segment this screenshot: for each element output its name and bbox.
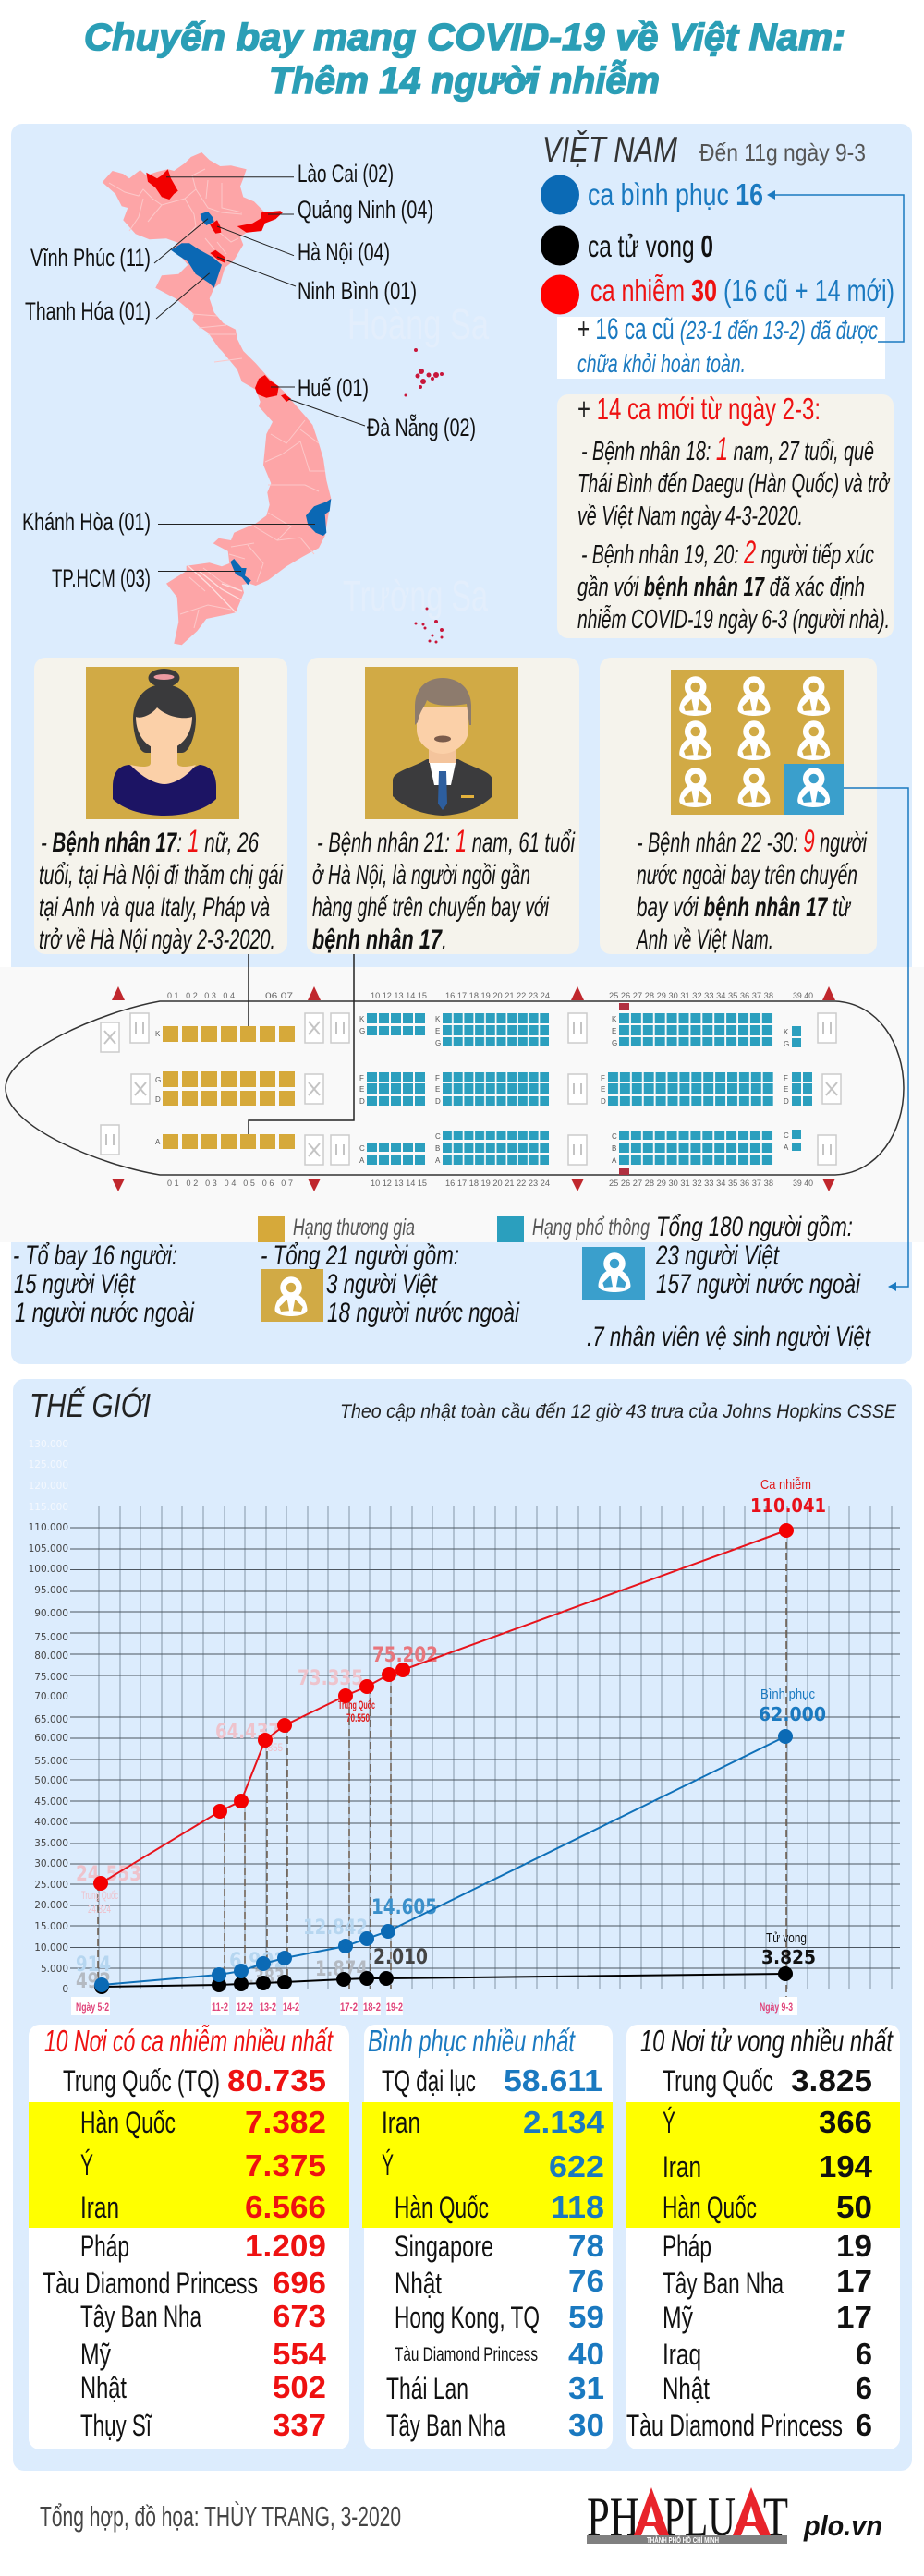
text: business class passengers: 18 người nước ngoài bbox=[327, 1298, 520, 1328]
rows: most infected: Nhật bbox=[80, 2371, 127, 2404]
arrow: old cases to recovered bbox=[767, 190, 904, 342]
seat letters: E bbox=[784, 1085, 788, 1094]
rows: most infected: 1.209 bbox=[245, 2229, 326, 2263]
rows: most deaths: 366 bbox=[819, 2105, 872, 2139]
rows: most infected: Iran bbox=[80, 2191, 119, 2224]
highlight: top deaths bbox=[626, 2102, 900, 2228]
seat letters: B bbox=[612, 1144, 616, 1153]
faded and highlighted value labels: 492 bbox=[76, 1970, 111, 1993]
end label: recovered: 62.000 bbox=[759, 1703, 826, 1725]
province labels: Huế (01) bbox=[298, 374, 369, 402]
business class seats bbox=[163, 1026, 295, 1149]
text: crew bbox=[13, 1240, 195, 1328]
rows: most deaths: Iran bbox=[663, 2150, 701, 2183]
y axis labels: 45.000 bbox=[34, 1796, 68, 1808]
seat letters: G bbox=[155, 1076, 161, 1084]
seat legend: Hạng thương gia bbox=[293, 1215, 415, 1240]
rows: most infected: Thụy Sĩ bbox=[80, 2409, 152, 2442]
rows: most deaths: Iraq bbox=[663, 2338, 701, 2371]
text: patients 22-30: - Bệnh nhân 22 -30: 9 người bbox=[637, 824, 868, 859]
seat letters: A bbox=[435, 1156, 441, 1165]
seat letters: F bbox=[784, 1074, 788, 1082]
rows: most recovered: 30 bbox=[568, 2408, 604, 2442]
rows: most infected: 80.735 bbox=[227, 2063, 326, 2098]
text: economy class passengers: 157 người nước ngoài bbox=[656, 1269, 861, 1300]
province labels: Khánh Hòa (01) bbox=[22, 508, 151, 536]
rows: most recovered: 118 bbox=[551, 2190, 604, 2224]
y axis labels: 75.000 bbox=[34, 1632, 68, 1643]
icon grid: nine passengers bbox=[671, 670, 844, 815]
province labels: Quảng Ninh (04) bbox=[298, 196, 433, 224]
date axis labels: 11-2 bbox=[212, 2002, 228, 2014]
y axis labels: 65.000 bbox=[34, 1714, 68, 1725]
logo: Pháp Luật: THÀNH PHỐ HỒ CHÍ MINH bbox=[647, 2534, 719, 2545]
heading: most recovered: Bình phục nhiều nhất bbox=[368, 2024, 576, 2058]
galleys and toilets bbox=[101, 1013, 841, 1165]
seat letters: E bbox=[435, 1027, 440, 1035]
rows: most recovered: 40 bbox=[568, 2337, 604, 2371]
text: business class passengers bbox=[261, 1240, 520, 1328]
rows: most deaths: Tàu Diamond Princess bbox=[626, 2409, 843, 2442]
rows: most deaths: Hàn Quốc bbox=[663, 2191, 757, 2224]
y axis labels: 110.000 bbox=[29, 1522, 68, 1533]
rows: most recovered: 59 bbox=[568, 2300, 604, 2334]
text: patients 22-30: Anh về Việt Nam. bbox=[636, 925, 773, 955]
watermark: Trường Sa islands bbox=[343, 572, 488, 643]
text: patient 17 bbox=[39, 824, 284, 955]
faded and highlighted value labels: 2.010 bbox=[373, 1946, 428, 1969]
rows: most recovered: Hong Kong, TQ bbox=[395, 2301, 540, 2334]
seat letters: A bbox=[155, 1138, 161, 1146]
y axis labels: 120.000 bbox=[29, 1481, 68, 1492]
credit: Tổng hợp, đồ họa: THÙY TRANG, 3-2020 bbox=[40, 2500, 401, 2533]
highlight: top recovered bbox=[362, 2102, 613, 2228]
province labels: TP.HCM (03) bbox=[52, 564, 151, 592]
rows: most deaths: 6 bbox=[856, 2337, 872, 2371]
row numbers: 10 12 13 14 15 bbox=[371, 991, 427, 1000]
province labels: Lào Cai (02) bbox=[298, 160, 394, 187]
text: economy class passengers bbox=[582, 1212, 871, 1352]
y axis labels: 55.000 bbox=[34, 1756, 68, 1767]
text: patient 21: bệnh nhân 17. bbox=[312, 925, 447, 955]
y axis labels: 60.000 bbox=[34, 1733, 68, 1744]
table: most infected bbox=[29, 2024, 349, 2449]
seat letters: F bbox=[435, 1074, 440, 1082]
rows: most infected: 6.566 bbox=[245, 2190, 326, 2224]
y axis labels: 105.000 bbox=[29, 1543, 68, 1554]
economy class seats bbox=[367, 1013, 812, 1165]
y axis labels: 5.000 bbox=[41, 1964, 68, 1975]
seat letters: A bbox=[359, 1156, 365, 1165]
seat letters: F bbox=[601, 1074, 605, 1082]
rows: most infected: 696 bbox=[273, 2266, 326, 2300]
card: patient 17 bbox=[34, 658, 287, 955]
panel: Thế giới bbox=[13, 1379, 912, 2471]
small China annotations: 70.550 bbox=[346, 1711, 370, 1724]
portrait: woman bbox=[86, 667, 239, 819]
rows: most recovered: 2.134 bbox=[523, 2105, 605, 2139]
y axis labels: 10.000 bbox=[34, 1942, 68, 1953]
logo: Pháp Luật bbox=[587, 2486, 882, 2547]
exit markers bbox=[112, 986, 835, 1191]
text: patient 17: tuổi, tại Hà Nội đi thăm chị gái bbox=[39, 860, 284, 890]
date axis labels: 18-2 bbox=[363, 2002, 381, 2014]
date axis labels: Ngày 9-3 bbox=[760, 2002, 793, 2014]
line chart bbox=[29, 1439, 900, 2015]
aircraft outline bbox=[6, 1001, 904, 1175]
y axis labels: 95.000 bbox=[34, 1585, 68, 1596]
end label: infected: Ca nhiễm bbox=[760, 1477, 811, 1493]
logo: Pháp Luật: PLU bbox=[663, 2486, 736, 2547]
text: patient 21 bbox=[312, 824, 576, 955]
dashed date guides bbox=[98, 1530, 786, 2004]
leader lines bbox=[154, 177, 365, 571]
map of Vietnam bbox=[22, 152, 489, 645]
text: patients 22-30: bay với bệnh nhân 17 từ bbox=[637, 892, 851, 923]
y axis labels: 115.000 bbox=[29, 1502, 68, 1513]
portrait: man bbox=[365, 667, 518, 819]
row numbers: 25 26 27 28 29 30 31 32 33 34 35 36 37 38 bbox=[609, 1179, 773, 1188]
legend: infected bbox=[541, 273, 894, 314]
heading: Thế giới: THẾ GIỚI bbox=[30, 1385, 151, 1424]
rows: most recovered: 78 bbox=[568, 2229, 604, 2263]
date axis labels: 19-2 bbox=[386, 2002, 403, 2014]
rows: most deaths: 50 bbox=[836, 2190, 872, 2224]
end label: deaths bbox=[761, 1930, 816, 1968]
legend: recovered: ca bình phục 16 bbox=[588, 177, 763, 212]
rows: most infected: Pháp bbox=[80, 2230, 129, 2263]
y axis labels: 20.000 bbox=[34, 1900, 68, 1911]
faded and highlighted value labels: 914 bbox=[76, 1953, 111, 1977]
text: patient 21: - Bệnh nhân 21: 1 nam, 61 tuổi bbox=[317, 824, 576, 859]
row numbers: 16 17 18 19 20 21 22 23 24 bbox=[445, 1179, 550, 1188]
rows: most recovered: Tây Ban Nha bbox=[386, 2409, 505, 2442]
small China annotations bbox=[81, 1699, 375, 1916]
rows: most deaths: Pháp bbox=[663, 2230, 711, 2263]
faded and highlighted value labels: 64.437 bbox=[215, 1721, 280, 1744]
text: business class passengers: - Tổng 21 người gồm: bbox=[261, 1240, 459, 1271]
seat letters: G bbox=[612, 1039, 617, 1047]
date axis labels: Ngày 5-2 bbox=[76, 2002, 109, 2014]
seat letters: F bbox=[359, 1074, 364, 1082]
province labels: Thanh Hóa (01) bbox=[25, 297, 151, 325]
rows: most infected: 7.375 bbox=[245, 2148, 326, 2183]
logo: Pháp Luật: plo.vn bbox=[803, 2509, 882, 2542]
faded and highlighted value labels: 12.842 bbox=[303, 1917, 368, 1940]
faded and highlighted value labels bbox=[76, 1644, 438, 1993]
faded and highlighted value labels: 24.553 bbox=[76, 1863, 141, 1886]
callout: 16 old cases: chữa khỏi hoàn toàn. bbox=[578, 349, 746, 378]
rows: most infected: Trung Quốc (TQ) bbox=[63, 2064, 220, 2098]
row numbers: 39 40 bbox=[793, 991, 813, 1000]
rows: most deaths: Mỹ bbox=[663, 2301, 693, 2334]
logo: Pháp Luật: PH bbox=[587, 2486, 639, 2547]
watermark: Hoàng Sa islands: Hoàng Sa bbox=[347, 300, 489, 348]
callout: 16 old cases bbox=[557, 312, 885, 379]
row numbers: 16 17 18 19 20 21 22 23 24 bbox=[445, 991, 550, 1000]
seat letters: E bbox=[612, 1027, 616, 1035]
series: deaths bbox=[94, 1966, 793, 1994]
legend: recovered bbox=[541, 175, 763, 214]
y axis labels: 90.000 bbox=[34, 1608, 68, 1619]
y axis labels: 75.000 bbox=[34, 1672, 68, 1683]
rows: most deaths: Trung Quốc bbox=[663, 2064, 773, 2098]
seat letters: K bbox=[435, 1015, 441, 1023]
y axis labels: 25.000 bbox=[34, 1880, 68, 1891]
end label: infected: 110.041 bbox=[750, 1494, 826, 1517]
seat letters: C bbox=[612, 1132, 617, 1141]
rows: most deaths: Tây Ban Nha bbox=[663, 2267, 784, 2300]
y axis labels: 35.000 bbox=[34, 1838, 68, 1849]
y axis labels: 15.000 bbox=[34, 1921, 68, 1932]
legend: deaths bbox=[541, 225, 713, 266]
province labels: Đà Nẵng (02) bbox=[367, 413, 476, 441]
y axis labels bbox=[29, 1439, 68, 1995]
heading: Việt Nam bbox=[542, 130, 866, 170]
seat map band bbox=[0, 967, 924, 1242]
arrow: passengers to economy totals bbox=[844, 788, 908, 1291]
date axis labels: 14-2 bbox=[283, 2002, 299, 2014]
seat letters: A bbox=[784, 1143, 789, 1152]
faded and highlighted value labels: 73.335 bbox=[298, 1667, 363, 1690]
heading: Việt Nam: Đến 11g ngày 9-3 bbox=[699, 139, 866, 166]
rows: most recovered: 622 bbox=[549, 2149, 604, 2183]
panel: 14 new cases: + 14 ca mới từ ngày 2-3: bbox=[578, 392, 821, 426]
end label: deaths: 3.825 bbox=[761, 1946, 816, 1968]
province labels: Ninh Bình (01) bbox=[298, 277, 417, 305]
date axis labels: 12-2 bbox=[237, 2002, 253, 2014]
panel: 14 new cases: về Việt Nam ngày 4-3-2020. bbox=[578, 502, 803, 531]
rows: most deaths: 3.825 bbox=[791, 2063, 872, 2098]
seat legend: Hạng phổ thông bbox=[532, 1215, 650, 1240]
text: business class passengers: 3 người Việt bbox=[326, 1269, 438, 1300]
seat letters: G bbox=[784, 1040, 789, 1048]
icon: business passenger bbox=[261, 1269, 323, 1322]
series: infected bbox=[93, 1523, 794, 1891]
faded and highlighted value labels: 14.605 bbox=[371, 1896, 437, 1919]
rows: most recovered: Thái Lan bbox=[386, 2372, 468, 2405]
rows: most deaths: 194 bbox=[819, 2149, 873, 2183]
panel: 14 new cases: - Bệnh nhân 19, 20: 2 người tiếp xúc bbox=[581, 535, 874, 571]
series: recovered bbox=[94, 1729, 793, 1992]
rows: most recovered: Nhật bbox=[395, 2267, 442, 2300]
text: patient 21: hàng ghế trên chuyến bay với bbox=[312, 892, 550, 923]
watermark: Trường Sa islands: Trường Sa bbox=[343, 572, 488, 620]
text: economy class passengers: 23 người Việt bbox=[655, 1240, 780, 1271]
rows: most infected: 7.382 bbox=[245, 2105, 326, 2139]
end label: deaths: Tử vong bbox=[766, 1930, 807, 1946]
province labels bbox=[22, 160, 476, 592]
rows: most infected: Ý bbox=[80, 2148, 93, 2182]
seat legend bbox=[258, 1215, 650, 1242]
title: Thêm 14 người nhiễm bbox=[269, 59, 660, 102]
row numbers: 06 07 bbox=[265, 991, 293, 1000]
seat letters: A bbox=[612, 1156, 617, 1165]
seat letters: K bbox=[155, 1030, 161, 1038]
rows: most recovered: 31 bbox=[568, 2371, 604, 2405]
rows: most deaths: 17 bbox=[836, 2300, 872, 2334]
province labels: Hà Nội (04) bbox=[298, 238, 390, 266]
faded and highlighted value labels: 75.202 bbox=[372, 1644, 438, 1667]
rows: most deaths: 6 bbox=[856, 2408, 872, 2442]
rows: most recovered bbox=[382, 2063, 605, 2442]
rows: most deaths: 17 bbox=[836, 2264, 872, 2298]
rows: most recovered: Iran bbox=[382, 2106, 420, 2139]
heading: Việt Nam: VIỆT NAM bbox=[542, 130, 677, 170]
seat letters: D bbox=[601, 1097, 606, 1106]
faded and highlighted value labels: 6.902 bbox=[229, 1950, 286, 1973]
table: most deaths bbox=[626, 2024, 900, 2449]
small China annotations: 24.324 bbox=[88, 1903, 111, 1916]
end label: recovered: Bình phục bbox=[760, 1687, 815, 1702]
seat letters: K bbox=[784, 1028, 789, 1036]
rows: most infected: Tây Ban Nha bbox=[80, 2300, 201, 2333]
rows: most infected: 554 bbox=[273, 2337, 327, 2371]
seat letters: D bbox=[155, 1095, 161, 1104]
faded and highlighted value labels: 1.874 bbox=[315, 1958, 368, 1981]
row numbers bbox=[167, 991, 813, 1188]
y axis labels: 130.000 bbox=[29, 1439, 68, 1450]
seat letters: B bbox=[435, 1144, 440, 1153]
logo: Pháp Luật: T bbox=[763, 2486, 788, 2547]
date axis labels: 13-2 bbox=[260, 2002, 276, 2014]
text: crew: 1 người nước ngoài bbox=[15, 1298, 195, 1328]
faded and highlighted value labels: 1.383 bbox=[238, 1966, 285, 1989]
rows: most deaths bbox=[626, 2063, 873, 2442]
rows: most infected: Mỹ bbox=[80, 2338, 111, 2371]
small China annotations: Trung Quốc bbox=[338, 1699, 375, 1711]
small China annotations: Trung Quốc bbox=[81, 1889, 118, 1902]
text: patient 21: ở Hà Nội, là người ngồi gần bbox=[312, 860, 530, 890]
small China annotations: .855 bbox=[265, 1741, 283, 1754]
rows: most infected: 502 bbox=[273, 2370, 326, 2404]
y axis labels: 70.000 bbox=[34, 1691, 68, 1702]
highlight: top infected bbox=[29, 2102, 349, 2228]
y axis labels: 125.000 bbox=[29, 1459, 68, 1470]
text: economy class passengers: Tổng 180 người gồm: bbox=[656, 1212, 853, 1242]
seat letters: E bbox=[359, 1085, 364, 1094]
rows: most infected: Hàn Quốc bbox=[80, 2106, 176, 2139]
connector lines to seats bbox=[249, 954, 354, 1134]
provinces in blue: Vĩnh Phúc, Thanh Hóa, Khánh Hòa, TP.HCM bbox=[171, 212, 331, 585]
text: crew: - Tổ bay 16 người: bbox=[13, 1240, 177, 1271]
rows: most infected: 673 bbox=[273, 2299, 326, 2333]
panel: Việt Nam bbox=[0, 124, 924, 1364]
y axis labels: 30.000 bbox=[34, 1858, 68, 1869]
heading: most infected: 10 Nơi có ca nhiễm nhiều nhất bbox=[44, 2024, 334, 2058]
end label: infected bbox=[750, 1477, 826, 1517]
watermark: Hoàng Sa islands bbox=[347, 300, 489, 397]
text: crew: 15 người Việt bbox=[14, 1269, 136, 1300]
panel: 14 new cases bbox=[557, 392, 894, 638]
rows: most deaths: Nhật bbox=[663, 2372, 710, 2405]
card: patient 21 bbox=[307, 658, 579, 955]
row numbers: 25 26 27 28 29 30 31 32 33 34 35 36 37 38 bbox=[609, 991, 773, 1000]
y axis labels: 100.000 bbox=[29, 1564, 68, 1575]
rows: most deaths: 19 bbox=[836, 2229, 872, 2263]
y axis labels: 80.000 bbox=[34, 1651, 68, 1662]
y axis labels: 0 bbox=[62, 1984, 68, 1995]
rows: most deaths: Ý bbox=[663, 2106, 675, 2139]
icon: economy passenger bbox=[582, 1247, 645, 1300]
title bbox=[84, 16, 845, 102]
panel: 14 new cases: gần với bệnh nhân 17 đã xác định bbox=[578, 573, 865, 602]
legend: deaths: ca tử vong 0 bbox=[588, 229, 713, 263]
y axis labels: 40.000 bbox=[34, 1817, 68, 1828]
date axis labels bbox=[71, 1997, 797, 2015]
rows: most recovered: Ý bbox=[382, 2148, 394, 2182]
row numbers: 01 02 03 04 05 06 07 bbox=[167, 1179, 293, 1188]
y axis labels: 50.000 bbox=[34, 1775, 68, 1786]
table: most recovered bbox=[362, 2024, 613, 2449]
rows: most infected bbox=[43, 2063, 327, 2442]
seat letters: C bbox=[784, 1131, 789, 1140]
text: patients 22-30 bbox=[636, 824, 868, 955]
rows: most deaths: 6 bbox=[856, 2371, 872, 2405]
seat letters: D bbox=[435, 1097, 441, 1106]
seat letters bbox=[155, 1015, 789, 1165]
rows: most recovered: TQ đại lục bbox=[382, 2064, 476, 2098]
seat letters: K bbox=[612, 1015, 617, 1023]
seat letters: G bbox=[359, 1027, 365, 1035]
rows: most recovered: Tàu Diamond Princess bbox=[395, 2344, 538, 2365]
seat letters: D bbox=[359, 1097, 365, 1106]
seat letters: E bbox=[435, 1085, 440, 1094]
date axis labels: 17-2 bbox=[340, 2002, 358, 2014]
end label: recovered bbox=[759, 1687, 826, 1725]
row numbers: 39 40 bbox=[793, 1179, 813, 1188]
province labels: Vĩnh Phúc (11) bbox=[30, 244, 151, 272]
rows: most infected: Tàu Diamond Princess bbox=[43, 2267, 258, 2300]
rows: most recovered: Singapore bbox=[395, 2230, 493, 2263]
text: patient 17: - Bệnh nhân 17: 1 nữ, 26 bbox=[41, 824, 259, 859]
seat letters: C bbox=[359, 1144, 365, 1153]
row numbers: 01 02 03 04 bbox=[167, 991, 235, 1000]
rows: most recovered: 58.611 bbox=[504, 2063, 602, 2098]
provinces in red: Lào Cai, Quảng Ninh, Hà Nội, Ninh Bình, Huế, Đà Nẵng bbox=[146, 169, 291, 402]
text: patient 17: trở về Hà Nội ngày 2-3-2020. bbox=[39, 925, 275, 955]
seat letters: G bbox=[435, 1039, 441, 1047]
row numbers: 10 12 13 14 15 bbox=[371, 1179, 427, 1188]
card: patients 22-30 bbox=[600, 658, 877, 955]
rows: most infected: 337 bbox=[273, 2408, 326, 2442]
seat letters: K bbox=[359, 1015, 365, 1023]
rows: most recovered: 76 bbox=[568, 2264, 604, 2298]
seat letters: D bbox=[784, 1097, 789, 1106]
rows: most recovered: Hàn Quốc bbox=[395, 2191, 489, 2224]
text: patient 17: tại Anh và qua Italy, Pháp và bbox=[39, 892, 270, 923]
source note: Theo cập nhật toàn cầu đến 12 giờ 43 trưa của Johns Hopkins CSSE bbox=[340, 1401, 897, 1422]
title: Chuyến bay mang COVID-19 về Việt Nam: bbox=[84, 16, 845, 58]
seat letters: E bbox=[601, 1085, 605, 1094]
seat letters: C bbox=[435, 1132, 441, 1141]
